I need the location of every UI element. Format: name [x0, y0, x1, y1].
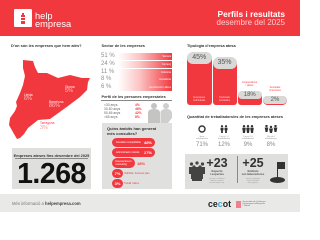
age percentages: 42%	[135, 111, 142, 115]
map label: Tarragona: 3%	[40, 124, 48, 130]
age percentages	[135, 103, 142, 119]
bar label: Administració i tràmits	[116, 151, 139, 154]
label: Limitades	[219, 99, 230, 102]
label: Sense	[199, 136, 205, 138]
percent pill: 45%	[192, 54, 206, 61]
total number: 1.268	[17, 158, 86, 190]
bar: funding: 7%	[115, 170, 120, 176]
label: cooperatives: Cooperatives	[242, 81, 257, 84]
title line 2: desembre del 2025	[216, 18, 285, 26]
label: individuals	[193, 99, 205, 102]
workers: 3-5	[242, 125, 254, 148]
label: cooperatives: i altres	[246, 84, 253, 87]
logo text: help	[35, 11, 53, 21]
text: Generalitat de Catalunya	[242, 201, 266, 203]
title line 1: Perfils i resultats	[218, 8, 285, 18]
sectors chart: Serveis	[162, 55, 171, 58]
note	[209, 178, 225, 184]
panel question: Quins àmbits han generat	[107, 126, 156, 131]
map label: Tarragona	[40, 121, 54, 130]
type bar: limited	[212, 57, 236, 105]
map label: Tarragona: Tarragona	[40, 121, 54, 125]
label: treballadors/es	[265, 138, 277, 140]
note: amb la iniciativa	[211, 180, 223, 182]
bar: funding	[112, 168, 123, 178]
total companies panel	[12, 148, 91, 189]
percent: 12%	[218, 142, 230, 148]
label: col·laboradores	[242, 172, 264, 176]
logo text: empresa	[35, 19, 71, 29]
label: Empreses	[193, 96, 205, 99]
panel question: més consultes?	[107, 131, 137, 136]
title	[216, 8, 285, 26]
label	[196, 136, 208, 140]
percent pill	[212, 57, 236, 69]
bar label: Fiscalitat i comptabilitat	[116, 141, 141, 144]
map label: Girona: Girona	[65, 84, 75, 88]
label: other: Treball i altres	[124, 182, 139, 185]
label: Més de 6	[267, 136, 275, 138]
icon: group of people	[189, 161, 205, 181]
label	[265, 136, 277, 140]
label: cooperatives	[242, 81, 258, 87]
label: partnerships	[269, 86, 281, 92]
bar label: i consulting	[115, 163, 127, 166]
label	[242, 136, 254, 140]
type bar: individual	[187, 52, 212, 105]
note	[246, 178, 260, 184]
map label: Lleida: Lleida	[24, 92, 33, 96]
label	[219, 96, 230, 102]
heading: sectors: Sector de les empreses	[102, 43, 145, 48]
icon: people	[242, 125, 254, 133]
label: treballadors/es	[242, 138, 254, 140]
type bar: partnerships	[263, 96, 287, 105]
icon: people	[264, 125, 278, 133]
percent: 9%	[244, 142, 252, 148]
label	[218, 136, 230, 140]
percent pill	[187, 52, 212, 64]
panel question	[107, 126, 156, 136]
percent pill	[263, 96, 287, 104]
workers: 1-2	[218, 125, 230, 148]
icon: flag on target	[270, 162, 285, 183]
stat: entities	[242, 156, 264, 184]
heading: typology: Tipologia d'empresa atesa	[187, 43, 236, 48]
label	[242, 169, 264, 176]
label: D'entre 3 i 5	[243, 136, 253, 138]
sectors chart: Hostaleria	[159, 78, 171, 81]
type bar: cooperatives	[238, 91, 262, 105]
percent: 8%	[267, 142, 275, 148]
map label: Girona: 5%	[65, 88, 73, 94]
divider	[236, 156, 238, 183]
age labels: <30 anys	[104, 103, 117, 107]
number: +25	[242, 156, 264, 170]
label	[193, 96, 206, 102]
logo: Generalitat	[236, 201, 266, 208]
header band	[0, 0, 300, 36]
text: Departament d'Empresa	[242, 203, 265, 205]
bar label: Assessorament	[115, 160, 131, 163]
emblem	[236, 201, 241, 208]
map label: Barcelona	[49, 100, 64, 109]
bar value: 48%	[144, 140, 152, 145]
bar: consulting	[112, 158, 135, 168]
sectors chart	[101, 52, 172, 91]
label: Experts	[211, 169, 222, 173]
map label: Lleida: 6%	[24, 96, 32, 102]
label: D'entre 1 i 2	[219, 136, 229, 138]
workers: 6+	[264, 125, 278, 148]
map label: Barcelona: Barcelona	[49, 100, 63, 104]
label: Societats	[219, 96, 230, 99]
map label: Lleida	[24, 92, 33, 102]
label: treballadors/es	[196, 138, 208, 140]
sectors chart: 11 %	[101, 69, 114, 75]
text: i Treball	[242, 205, 250, 207]
percent: 71%	[196, 142, 208, 148]
panel: experts and entities	[185, 154, 288, 189]
sectors chart: 6 %	[101, 84, 111, 90]
sectors chart: 24 %	[101, 61, 115, 67]
label: i expertes	[210, 172, 224, 176]
sectors chart: 51 %	[101, 53, 115, 59]
stat: experts	[206, 156, 228, 184]
heading: workers: Quantitat de treballadors/es de les empreses ateses	[187, 114, 283, 119]
bar value: 27%	[144, 150, 152, 155]
icon: ring	[198, 125, 206, 133]
footer text: Més informació a helpempresa.com	[12, 201, 81, 206]
sectors chart: 8 %	[101, 76, 111, 82]
profile table	[104, 103, 142, 119]
sectors chart: Comerç	[162, 63, 171, 66]
label: funding: Viabilitat i business plan	[124, 172, 149, 174]
percent pill: 2%	[271, 97, 279, 103]
bar: other	[112, 179, 123, 188]
bar: administration	[112, 148, 155, 157]
bar: other: 3%	[115, 181, 120, 186]
heading: map: D'on són les empreses que hem atès?	[11, 43, 82, 48]
workers: zero	[196, 125, 208, 148]
panel heading: Empreses ateses fins desembre del 2025	[14, 153, 89, 158]
icon: business people	[148, 103, 172, 123]
label: Entitats	[247, 169, 258, 173]
age labels: 30-50 anys	[104, 107, 120, 111]
bar: legal	[112, 138, 155, 147]
age labels: >65 anys	[104, 115, 117, 119]
map label: Barcelona: 86%	[49, 103, 60, 109]
logo text	[35, 11, 72, 29]
heading: profile: Perfil de les persones empresàries	[102, 94, 166, 99]
percent pill	[238, 91, 262, 99]
sectors chart: Construcció i altres	[149, 86, 171, 89]
text	[242, 201, 266, 208]
divider	[15, 157, 88, 160]
percent pill: 35%	[217, 59, 232, 66]
percent pill: 18%	[244, 92, 256, 98]
label: partnerships: Societats	[270, 86, 280, 89]
note: del programa	[248, 182, 258, 184]
icon: people	[220, 125, 228, 133]
logo: cecot: cecot	[208, 199, 231, 209]
age percentages: 4%	[135, 103, 140, 107]
bar label	[115, 160, 132, 166]
note: durant aquest any	[210, 182, 224, 184]
label	[210, 169, 224, 176]
label: treballadors/es	[218, 138, 230, 140]
value: consulting: 18%	[137, 161, 145, 166]
age percentages: 46%	[135, 107, 142, 111]
footer band	[0, 194, 300, 212]
panel: areas	[102, 123, 172, 189]
sectors chart: Indústria	[161, 71, 171, 74]
note: que han participat	[246, 178, 260, 180]
logo	[14, 9, 72, 29]
map label: Girona	[65, 84, 75, 94]
number: +23	[206, 156, 228, 170]
logo icon	[14, 9, 32, 27]
age labels	[104, 103, 120, 119]
note: en les activitats	[247, 180, 259, 182]
age labels: 50-65 anys	[104, 111, 120, 115]
label: partnerships: Anònimes	[269, 89, 281, 92]
note: que han col·laborat	[209, 178, 225, 180]
age percentages: 8%	[135, 115, 140, 119]
